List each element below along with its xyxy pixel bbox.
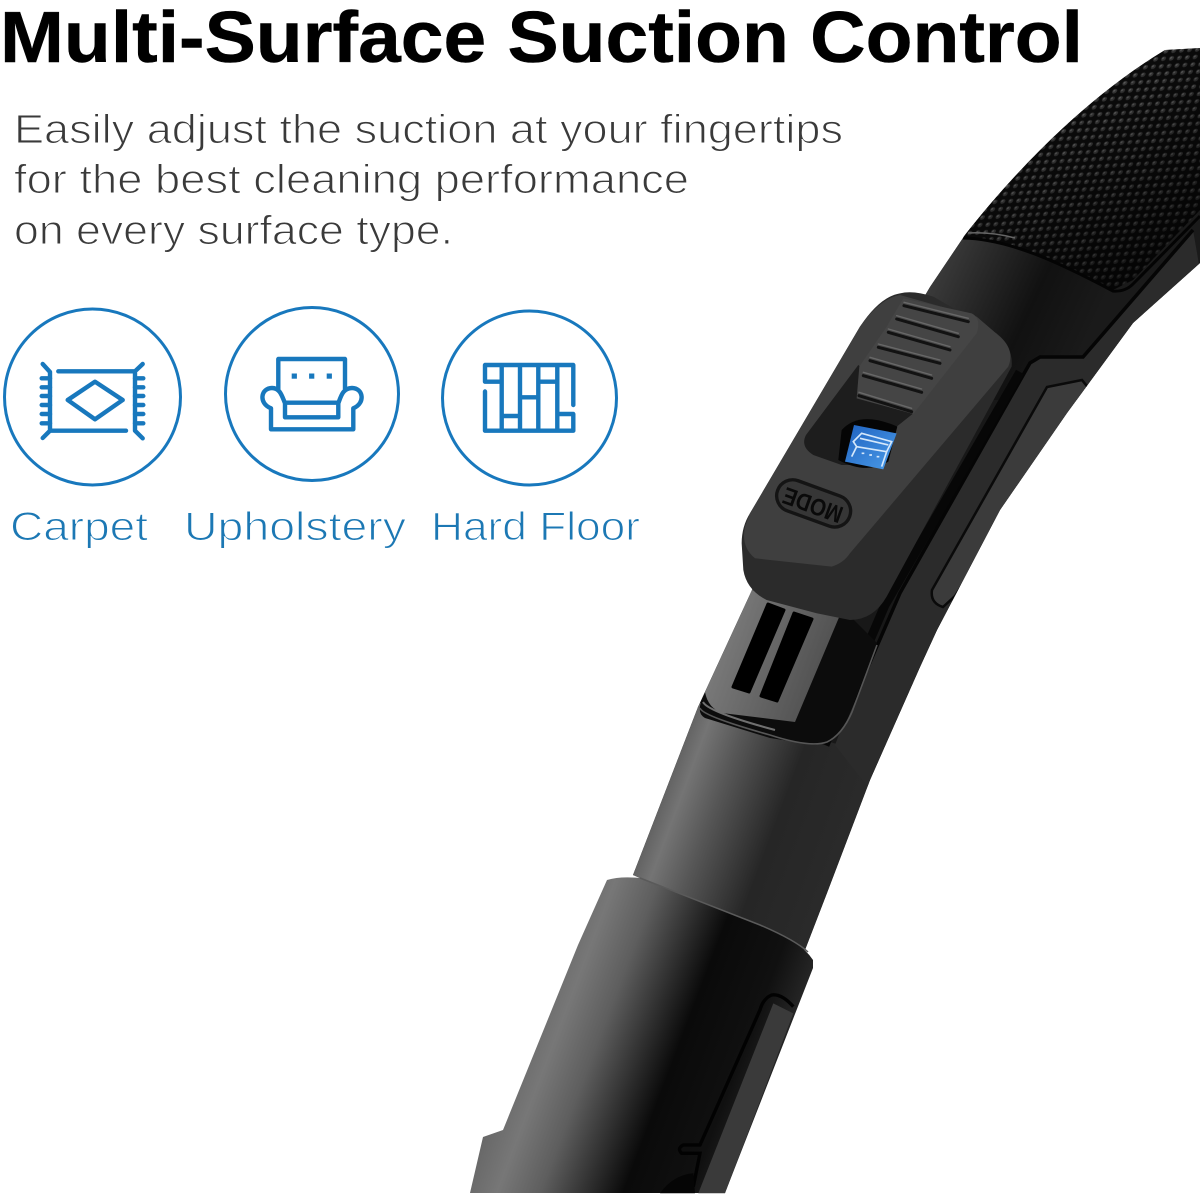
surface labels [10,505,640,549]
vent slots [733,604,812,701]
product photo: vacuum handle [470,40,1200,1193]
side panel inset [932,380,1090,607]
panel: surface types [4,308,640,549]
title: Multi-Surface Suction Control [0,0,1083,78]
subtitle text block: Easily adjust the suction at your fingertips [14,106,843,152]
collar clip tab [660,995,793,1193]
button recess [804,365,913,465]
ridged button [857,298,978,414]
vent plate [705,590,840,722]
telescoping collar [470,877,813,1193]
subtitle text block [14,106,843,253]
mode window with blue indicator [838,419,897,469]
mode slider [742,292,1012,620]
surface labels: Carpet [10,505,148,549]
subtitle text block: on every surface type. [14,207,453,253]
subtitle text block: for the best cleaning performance [14,156,689,202]
slider shadow groove [825,372,1020,745]
surface labels: Upholstery [184,505,406,549]
side panel band [835,230,1200,790]
mode label: MODE [779,481,847,528]
icon: hard floor [442,311,616,485]
icon: carpet [4,309,180,485]
vent section [700,590,877,745]
knurled grip [963,48,1200,290]
icon: upholstery armchair [226,308,398,480]
surface labels: Hard Floor [431,505,640,549]
tube body [633,48,1200,950]
